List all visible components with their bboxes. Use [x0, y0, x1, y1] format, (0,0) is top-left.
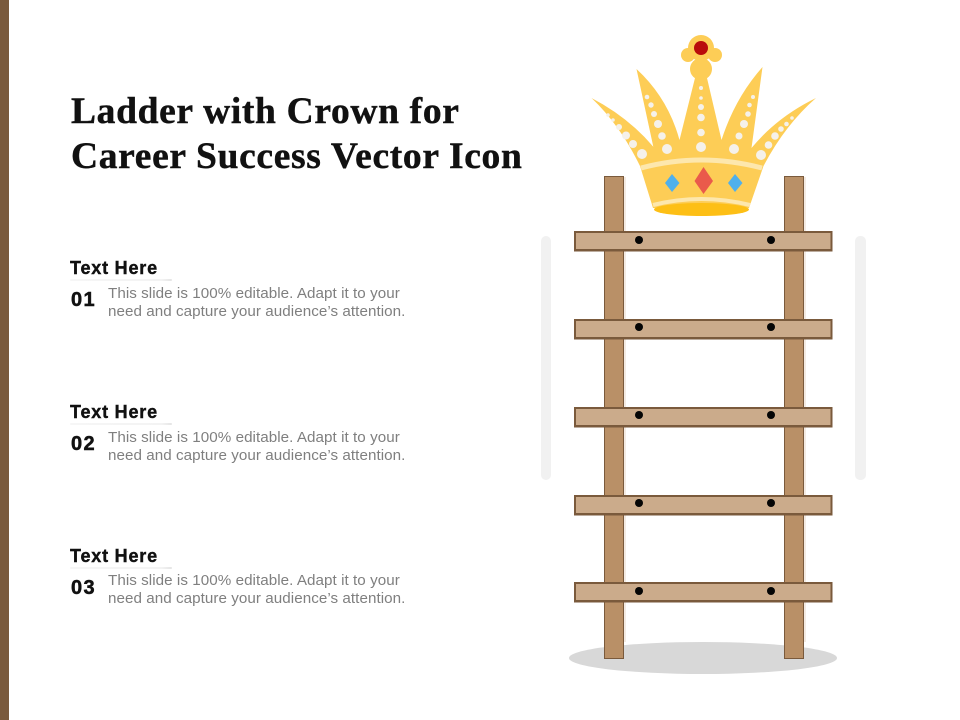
title — [71, 91, 522, 176]
ladder rungs — [574, 232, 832, 602]
text block 03: need and capture your audience’s attention. — [108, 590, 405, 607]
text block 02: need and capture your audience’s attention. — [108, 447, 405, 464]
text block 01: This slide is 100% editable. Adapt it to your — [108, 285, 400, 302]
left brown sidebar — [0, 0, 9, 720]
crown base — [654, 203, 749, 216]
crown finial — [681, 35, 722, 80]
ladder rails — [604, 176, 806, 658]
crown gems — [694, 167, 713, 194]
title: Career Success Vector Icon — [71, 136, 522, 176]
ground shadow — [569, 642, 837, 674]
text block 01: Text Here — [70, 258, 158, 278]
crown — [592, 35, 816, 216]
text block 02 — [70, 402, 405, 464]
text block 03: This slide is 100% editable. Adapt it to your — [108, 572, 400, 589]
text block 02: Text Here — [70, 402, 158, 422]
left side pale bar — [541, 236, 551, 480]
title: Ladder with Crown for — [71, 91, 460, 132]
right side pale bar — [855, 236, 866, 480]
text block 02: 02 — [71, 433, 96, 455]
crown bands — [641, 160, 762, 168]
text block 03: 03 — [71, 577, 96, 599]
text block 01: need and capture your audience’s attention. — [108, 303, 405, 320]
text block 03: Text Here — [70, 546, 158, 566]
text block 02: This slide is 100% editable. Adapt it to your — [108, 429, 400, 446]
text block 01: 01 — [71, 289, 96, 311]
text block 01 — [70, 258, 405, 320]
rung bolts — [635, 236, 775, 595]
red finial gem — [694, 41, 708, 55]
crown pearls — [606, 86, 794, 160]
crown body — [592, 67, 816, 208]
text block 03 — [70, 546, 405, 607]
